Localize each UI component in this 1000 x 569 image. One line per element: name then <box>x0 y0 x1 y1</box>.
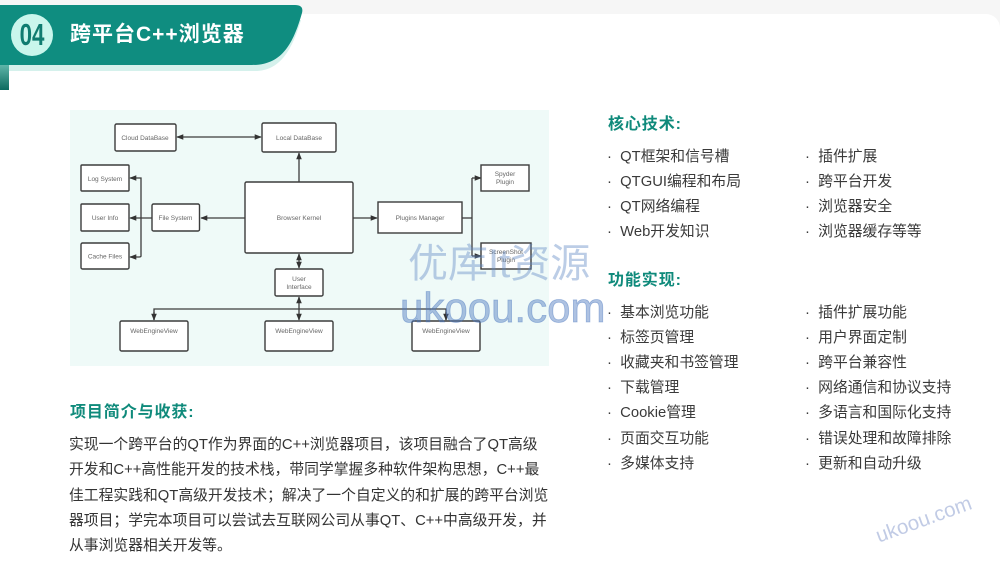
box labels: User <box>292 276 307 283</box>
list: core tech: · QT框架和信号槽 <box>607 149 729 165</box>
box labels: File System <box>159 215 192 222</box>
text block: project intro: 开发和C++高性能开发的技术栈，带同学掌握多种软件架构思想，C++最 <box>69 462 539 478</box>
text block: project intro <box>69 436 548 554</box>
title: 跨平台C++浏览器 <box>70 23 245 46</box>
list: core tech: · 跨平台开发 <box>805 174 892 190</box>
box labels: WebEngineView <box>422 328 470 335</box>
box labels: User Info <box>92 215 119 222</box>
heading: project intro: 项目简介与收获: <box>70 404 195 421</box>
list: features: · 页面交互功能 <box>607 431 709 447</box>
list: features: · 基本浏览功能 <box>607 305 709 321</box>
box labels: Plugin <box>496 179 514 186</box>
list: core tech: · QT网络编程 <box>607 199 700 215</box>
box labels: WebEngineView <box>130 328 178 335</box>
box labels: Browser Kernel <box>277 215 322 222</box>
list: core tech <box>607 148 922 240</box>
list: features: · 网络通信和协议支持 <box>805 380 951 396</box>
list: core tech: · 浏览器安全 <box>805 199 892 215</box>
watermark: centre <box>400 242 605 331</box>
box labels: Interface <box>286 284 312 291</box>
list: features: · 下载管理 <box>607 380 679 396</box>
box labels: Plugin <box>497 257 515 264</box>
box labels: Cache Files <box>88 254 123 260</box>
header banner <box>0 5 302 90</box>
list: features: · 更新和自动升级 <box>805 456 922 472</box>
list: core tech: · Web开发知识 <box>607 224 710 240</box>
list: features <box>607 304 951 472</box>
list: features: · 错误处理和故障排除 <box>805 431 951 447</box>
list: features: · 插件扩展功能 <box>805 305 907 321</box>
list: features: · 多媒体支持 <box>607 456 694 472</box>
architecture diagram <box>70 110 549 366</box>
watermark: centre: 优库It资源 <box>408 242 590 286</box>
connectors <box>130 137 481 320</box>
list: features: · 多语言和国际化支持 <box>805 405 951 421</box>
box labels: Cloud DataBase <box>121 135 169 142</box>
box labels: Spyder <box>495 171 516 178</box>
text block: project intro: 从事浏览器相关开发等。 <box>69 538 232 554</box>
box labels: Local DataBase <box>276 135 322 142</box>
list: features: · 用户界面定制 <box>805 330 907 346</box>
list: features: · 标签页管理 <box>607 330 694 346</box>
text block: project intro: 实现一个跨平台的QT作为界面的C++浏览器项目，该项目融合了QT高级 <box>69 437 538 453</box>
watermark: bottom right: ukoou.com <box>873 492 975 547</box>
boxes <box>81 123 531 351</box>
box labels: ScreenShot <box>489 249 523 256</box>
watermark: centre: ukoou.com <box>400 284 605 331</box>
text block: project intro: 器项目；学完本项目可以尝试去互联网公司从事QT、C++中高级开发，并 <box>69 513 547 529</box>
box labels: WebEngineView <box>275 328 323 335</box>
box labels: Plugins Manager <box>396 215 445 222</box>
box labels <box>88 135 523 335</box>
badge number: 04 <box>20 17 44 52</box>
text block: project intro: 佳工程实践和QT高级开发技术；解决了一个自定义的和扩展的跨平台浏览 <box>69 488 548 504</box>
list: core tech: · 浏览器缓存等等 <box>805 224 922 240</box>
list: core tech: · 插件扩展 <box>805 149 877 165</box>
heading: core tech: 核心技术: <box>608 116 682 133</box>
box labels: Log System <box>88 176 122 183</box>
list: features: · 收藏夹和书签管理 <box>607 355 739 371</box>
badge: 04 <box>11 14 53 56</box>
heading: features: 功能实现: <box>608 272 682 289</box>
list: features: · 跨平台兼容性 <box>805 355 907 371</box>
list: features: · Cookie管理 <box>607 405 696 421</box>
list: core tech: · QTGUI编程和布局 <box>607 174 741 190</box>
